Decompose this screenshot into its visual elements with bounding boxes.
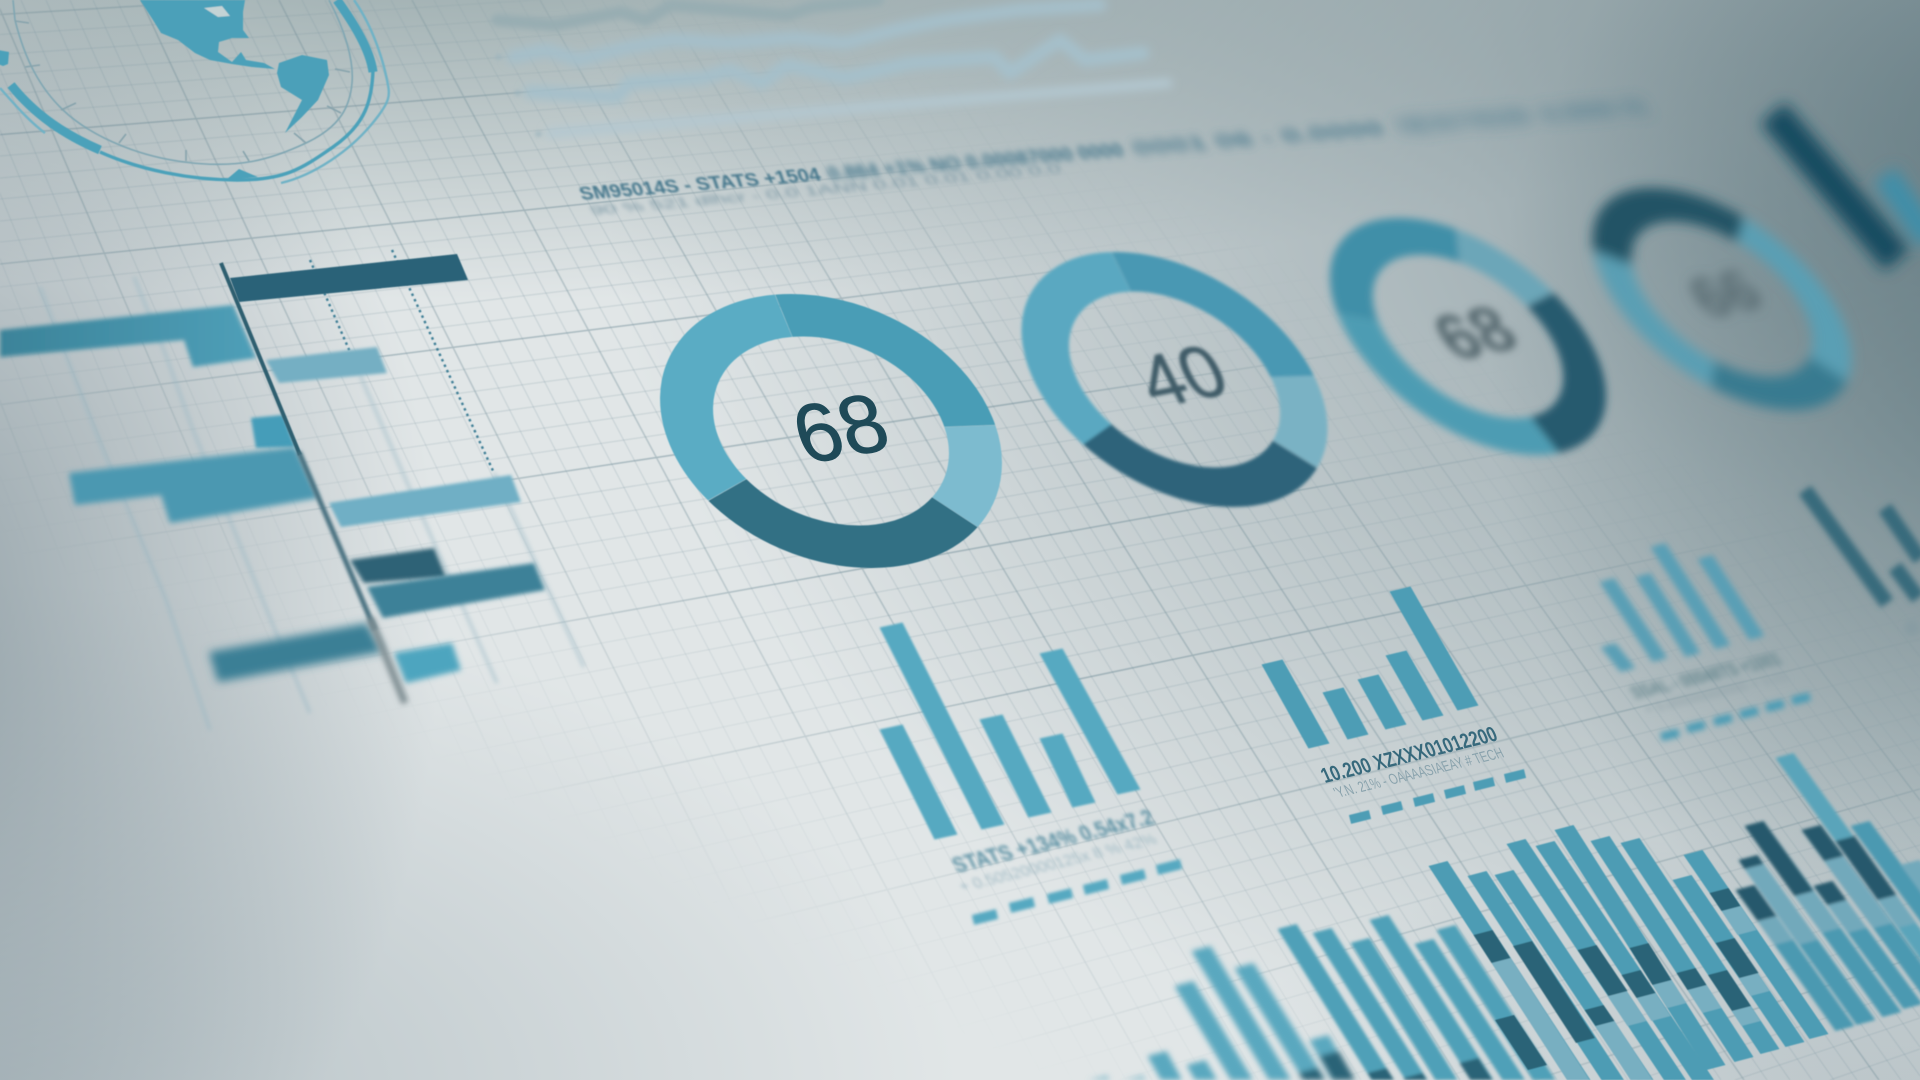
chart two dashes bbox=[1350, 774, 1525, 820]
donut 66 bbox=[1538, 137, 1906, 461]
large chart right light segments bbox=[1744, 856, 1920, 945]
large stacked bar chart bbox=[1088, 753, 1920, 1080]
chart four bars bbox=[1805, 490, 1920, 603]
donut 40 bbox=[962, 198, 1387, 561]
gantt bar low left bbox=[209, 623, 383, 682]
globe inner dial bbox=[13, 0, 352, 164]
globe bbox=[0, 0, 389, 183]
top right dark bar bbox=[1773, 113, 1897, 260]
gantt bar dark bbox=[350, 548, 446, 583]
large chart light segments bbox=[1492, 906, 1770, 1080]
donut 68 second value: 68 bbox=[1419, 293, 1532, 374]
large chart focus bars bbox=[1428, 825, 1828, 1080]
globe bezel notch bbox=[0, 50, 258, 180]
large chart left bars bbox=[1088, 946, 1355, 1080]
sparkline 1 bbox=[497, 0, 878, 25]
chart two bars bbox=[1262, 586, 1478, 748]
gantt chart bbox=[0, 250, 584, 730]
large chart right bars bbox=[1736, 753, 1920, 1031]
chart one caption: STATS +134% 0.54x7.2 bbox=[948, 805, 1158, 878]
sparkline 3 bbox=[530, 40, 1143, 97]
chart three dashes bbox=[1661, 696, 1810, 737]
chart two subcaption: 'Y.N. 21% - OAAAASIAEAY # TECH bbox=[1331, 745, 1507, 802]
header text part 2: 0.864 +1% NO 0.00087000 0000 bbox=[824, 139, 1126, 184]
gantt bar wide bbox=[69, 447, 318, 523]
globe tick marks bbox=[15, 21, 350, 161]
header text part 1: SM95014S - STATS +1504 bbox=[576, 164, 824, 204]
donut 40 value: 40 bbox=[1124, 329, 1241, 423]
gantt bar low right bbox=[394, 643, 461, 683]
sparkline 2 bbox=[513, 5, 1100, 60]
header text part 4: HEAVY8100 -0.0000 01 bbox=[1394, 95, 1652, 138]
donut 68 second ring bbox=[1270, 162, 1666, 511]
header text part 3: 0001 06 - 0.0000 bbox=[1129, 118, 1387, 160]
donut 40 ring bbox=[962, 198, 1387, 561]
south america bbox=[277, 55, 329, 133]
bar chart two bbox=[1262, 586, 1525, 820]
chart three bars bbox=[1600, 543, 1764, 672]
donut 68 bbox=[608, 249, 1054, 613]
globe main ring bbox=[100, 70, 373, 180]
chart one dashes bbox=[973, 864, 1181, 920]
donut 68 ring bbox=[608, 249, 1054, 613]
donut 66 ring bbox=[1538, 137, 1906, 461]
large chart middle bars bbox=[1278, 915, 1556, 1080]
sparklines bbox=[497, 0, 1168, 134]
donut 68 value: 68 bbox=[781, 376, 900, 481]
north america bbox=[140, 0, 275, 69]
gantt bar teal bbox=[367, 563, 545, 618]
globe thick arcs bbox=[11, 0, 373, 150]
chart four caption bbox=[1904, 620, 1920, 636]
gantt axis bbox=[221, 263, 405, 703]
chart one subcaption: + 0.50520000125x 8 % 42% bbox=[956, 831, 1160, 896]
chart one bars bbox=[880, 622, 1140, 840]
top right teal bars bbox=[1885, 175, 1920, 240]
bar chart three bbox=[1600, 543, 1810, 737]
gantt bar light right bbox=[329, 475, 521, 527]
top right bar chart bbox=[1773, 113, 1920, 260]
header text strip bbox=[576, 95, 1652, 218]
chart three caption: SSAL - 00048TS +1001 bbox=[1626, 648, 1785, 703]
sparkline start dots bbox=[498, 57, 539, 134]
hudson bay detail bbox=[204, 6, 230, 17]
gantt bar small bbox=[251, 415, 295, 448]
gantt bar light bbox=[266, 347, 387, 383]
bar chart four bbox=[1805, 490, 1920, 636]
donut 66 value: 66 bbox=[1676, 259, 1775, 329]
globe outer arcs bbox=[0, 0, 389, 183]
donut 68 second bbox=[1270, 162, 1666, 511]
chart two caption: 10.200 XZXXX01012200 bbox=[1317, 722, 1501, 788]
gantt bar dark top bbox=[230, 254, 468, 302]
chart three subcaption: + 0.00000000000 + 0.01 bbox=[1641, 669, 1792, 717]
gantt grid lines bbox=[40, 277, 584, 730]
bar chart one bbox=[880, 622, 1181, 920]
large chart dark segments bbox=[1474, 888, 1758, 1070]
large chart lower dark segments bbox=[1368, 1058, 1492, 1080]
gantt bars bbox=[0, 254, 545, 683]
gantt dotted lines bbox=[310, 250, 494, 473]
large chart right dark segments bbox=[1736, 821, 1896, 921]
gantt bar left long bbox=[0, 305, 256, 367]
sparkline 4 bbox=[550, 83, 1168, 133]
header subtext: 90 % 521 dlhcr - 0.0 1ANN 0.01 0.01 0.00 0.0 bbox=[588, 161, 1063, 218]
